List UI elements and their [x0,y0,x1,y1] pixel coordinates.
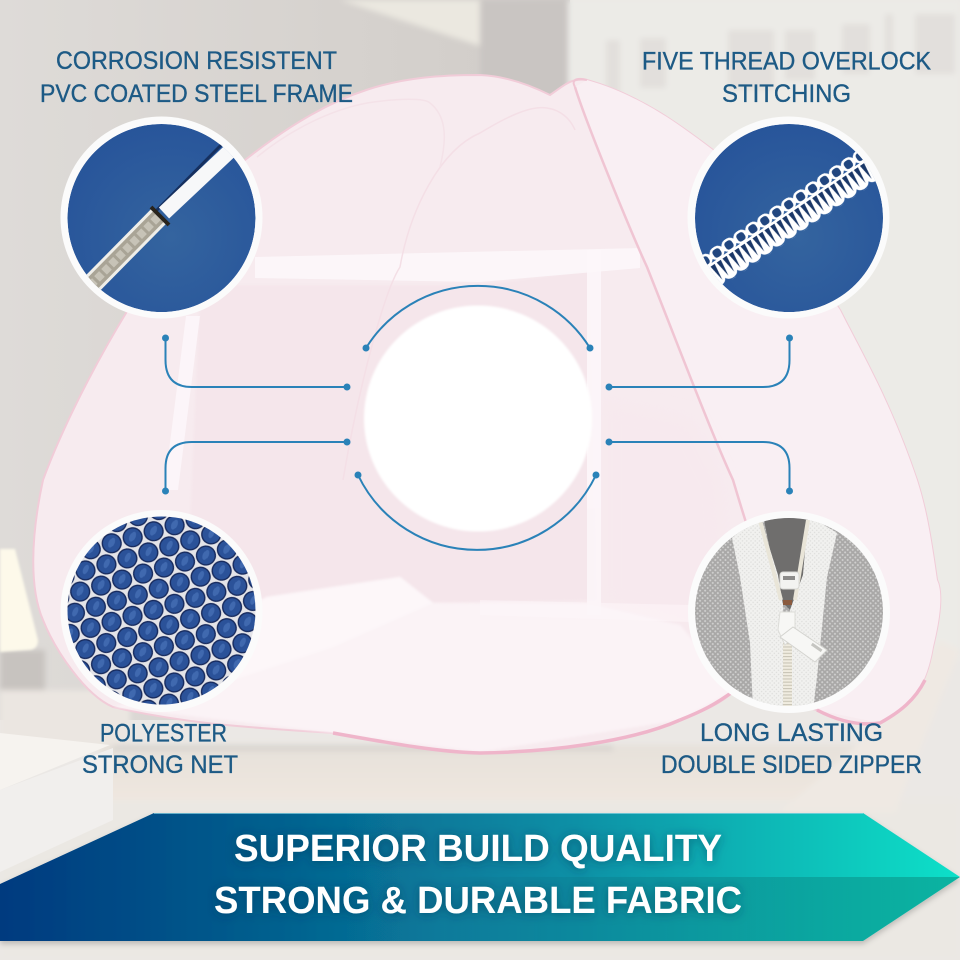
banner heading: STRONG & DURABLE FABRIC [214,880,742,922]
label: five thread overlock stitching [642,48,931,108]
label: five thread overlock stitching: STITCHING [722,80,851,108]
detail circle: overlock stitching [688,116,892,318]
tent: pink pop-up mosquito net [33,75,940,753]
label: corrosion resistent steel frame: PVC COATED STEEL FRAME [40,80,353,108]
label: polyester strong net: STRONG NET [82,751,238,779]
detail circle: polyester net [60,510,262,712]
detail circle: zipper [688,511,890,713]
banner heading [214,828,742,922]
connector: top right [606,334,793,390]
banner [0,813,960,941]
tent seams [257,79,925,753]
detail circle: steel frame [60,116,262,318]
label: long lasting double sided zipper [661,719,922,779]
label: five thread overlock stitching: FIVE THREAD OVERLOCK [642,48,931,76]
tent support straps [164,250,690,622]
connector: bottom left [162,438,350,494]
label: long lasting double sided zipper: LONG LASTING [700,719,883,747]
label: long lasting double sided zipper: DOUBLE SIDED ZIPPER [661,751,922,779]
tent back panel lace band [255,248,640,282]
label: polyester strong net: POLYESTER [100,720,227,748]
connector: center arcs [354,286,600,550]
banner heading: SUPERIOR BUILD QUALITY [234,828,722,870]
label: polyester strong net [82,720,238,779]
tent back right panel [602,400,735,680]
center white disc [364,306,592,532]
lamp [0,549,38,768]
label: corrosion resistent steel frame [40,47,353,108]
nightstand [0,733,113,872]
connector: top left [162,334,350,390]
label: corrosion resistent steel frame: CORROSION RESISTENT [56,47,337,75]
tent back panel [185,270,596,640]
tent right lobe [575,80,940,723]
connector: bottom right [606,438,793,494]
tent floor and pillow [113,577,735,752]
